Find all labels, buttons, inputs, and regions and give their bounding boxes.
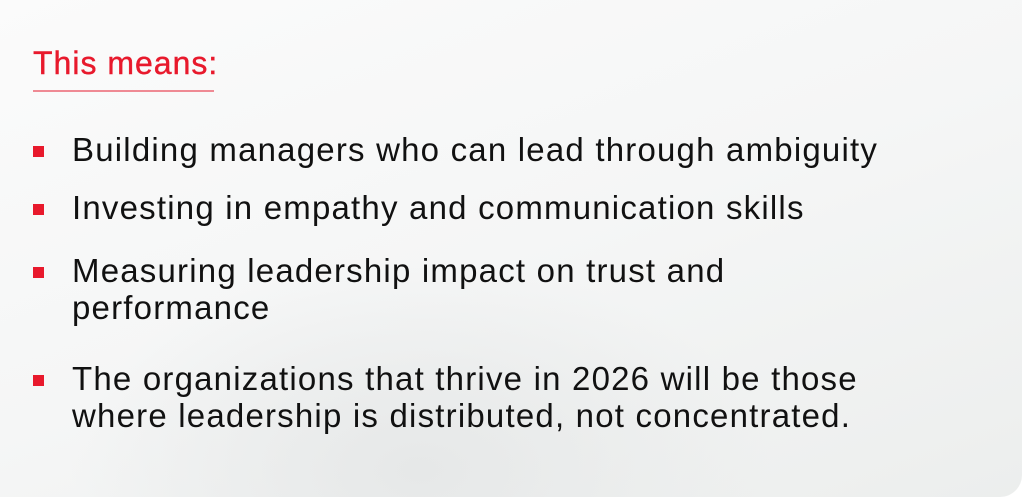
bullet 4: where leadership is distributed, not concentrated. bbox=[72, 397, 851, 434]
bullet 4 bbox=[33, 360, 858, 434]
bullet 3 bbox=[33, 252, 725, 326]
bullet 1: Building managers who can lead through ambiguity bbox=[72, 131, 878, 168]
bullet 4: The organizations that thrive in 2026 will be those bbox=[72, 360, 858, 397]
bullet 3: Measuring leadership impact on trust and bbox=[72, 252, 725, 289]
title: This means: bbox=[33, 45, 218, 81]
bullet 2: Investing in empathy and communication skills bbox=[72, 189, 805, 226]
bullet 3: performance bbox=[72, 289, 270, 326]
